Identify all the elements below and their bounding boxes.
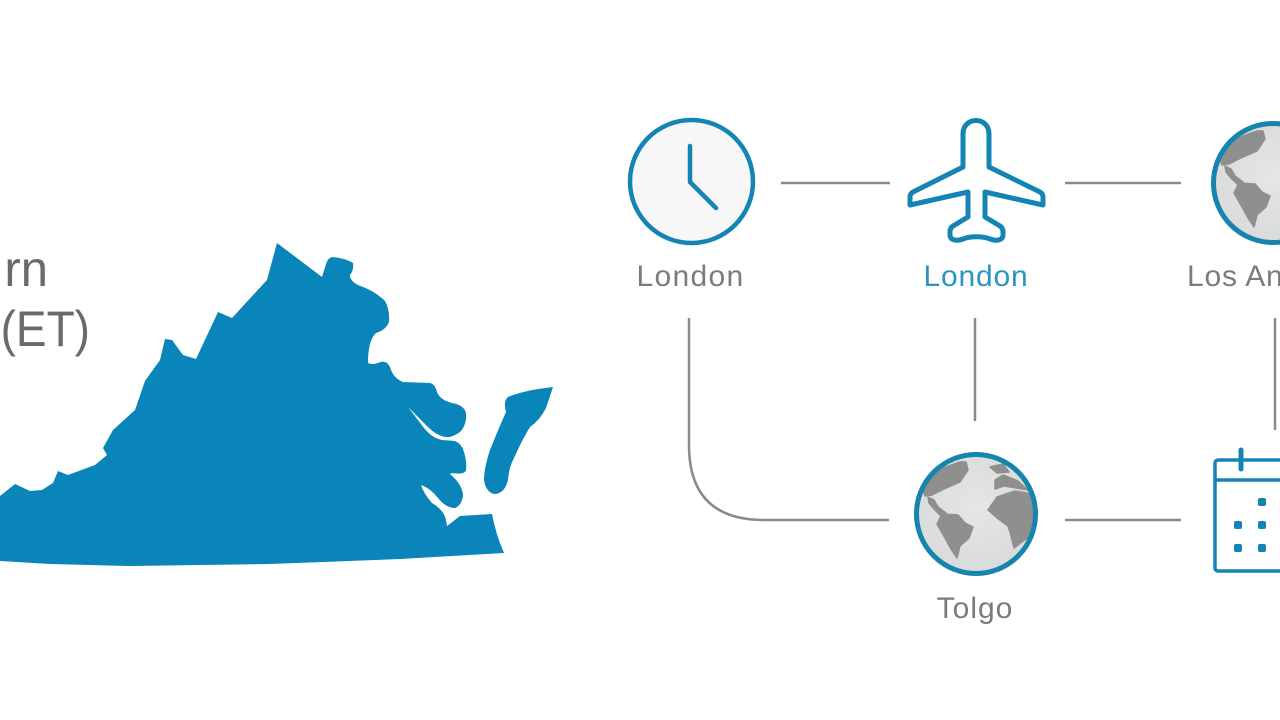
label: London (clock): London xyxy=(637,260,744,293)
connector lines between nodes xyxy=(689,183,1275,520)
icon: clock xyxy=(630,120,753,243)
label: Tolgo: Tolgo xyxy=(937,592,1013,625)
heading text: time zone label: (ET) xyxy=(1,302,90,357)
icon: airplane xyxy=(910,120,1043,240)
heading text: time zone label xyxy=(1,242,90,357)
heading text: time zone label: rn xyxy=(4,242,48,297)
label: London (airplane): London xyxy=(924,260,1028,293)
map: Eastern Shore peninsula xyxy=(484,387,553,494)
icon: globe top right xyxy=(1214,124,1280,242)
map: Virginia state silhouette xyxy=(0,243,553,566)
icon: globe bottom xyxy=(916,454,1038,574)
infographic canvas xyxy=(0,118,1280,624)
icon: calendar xyxy=(1215,450,1280,571)
